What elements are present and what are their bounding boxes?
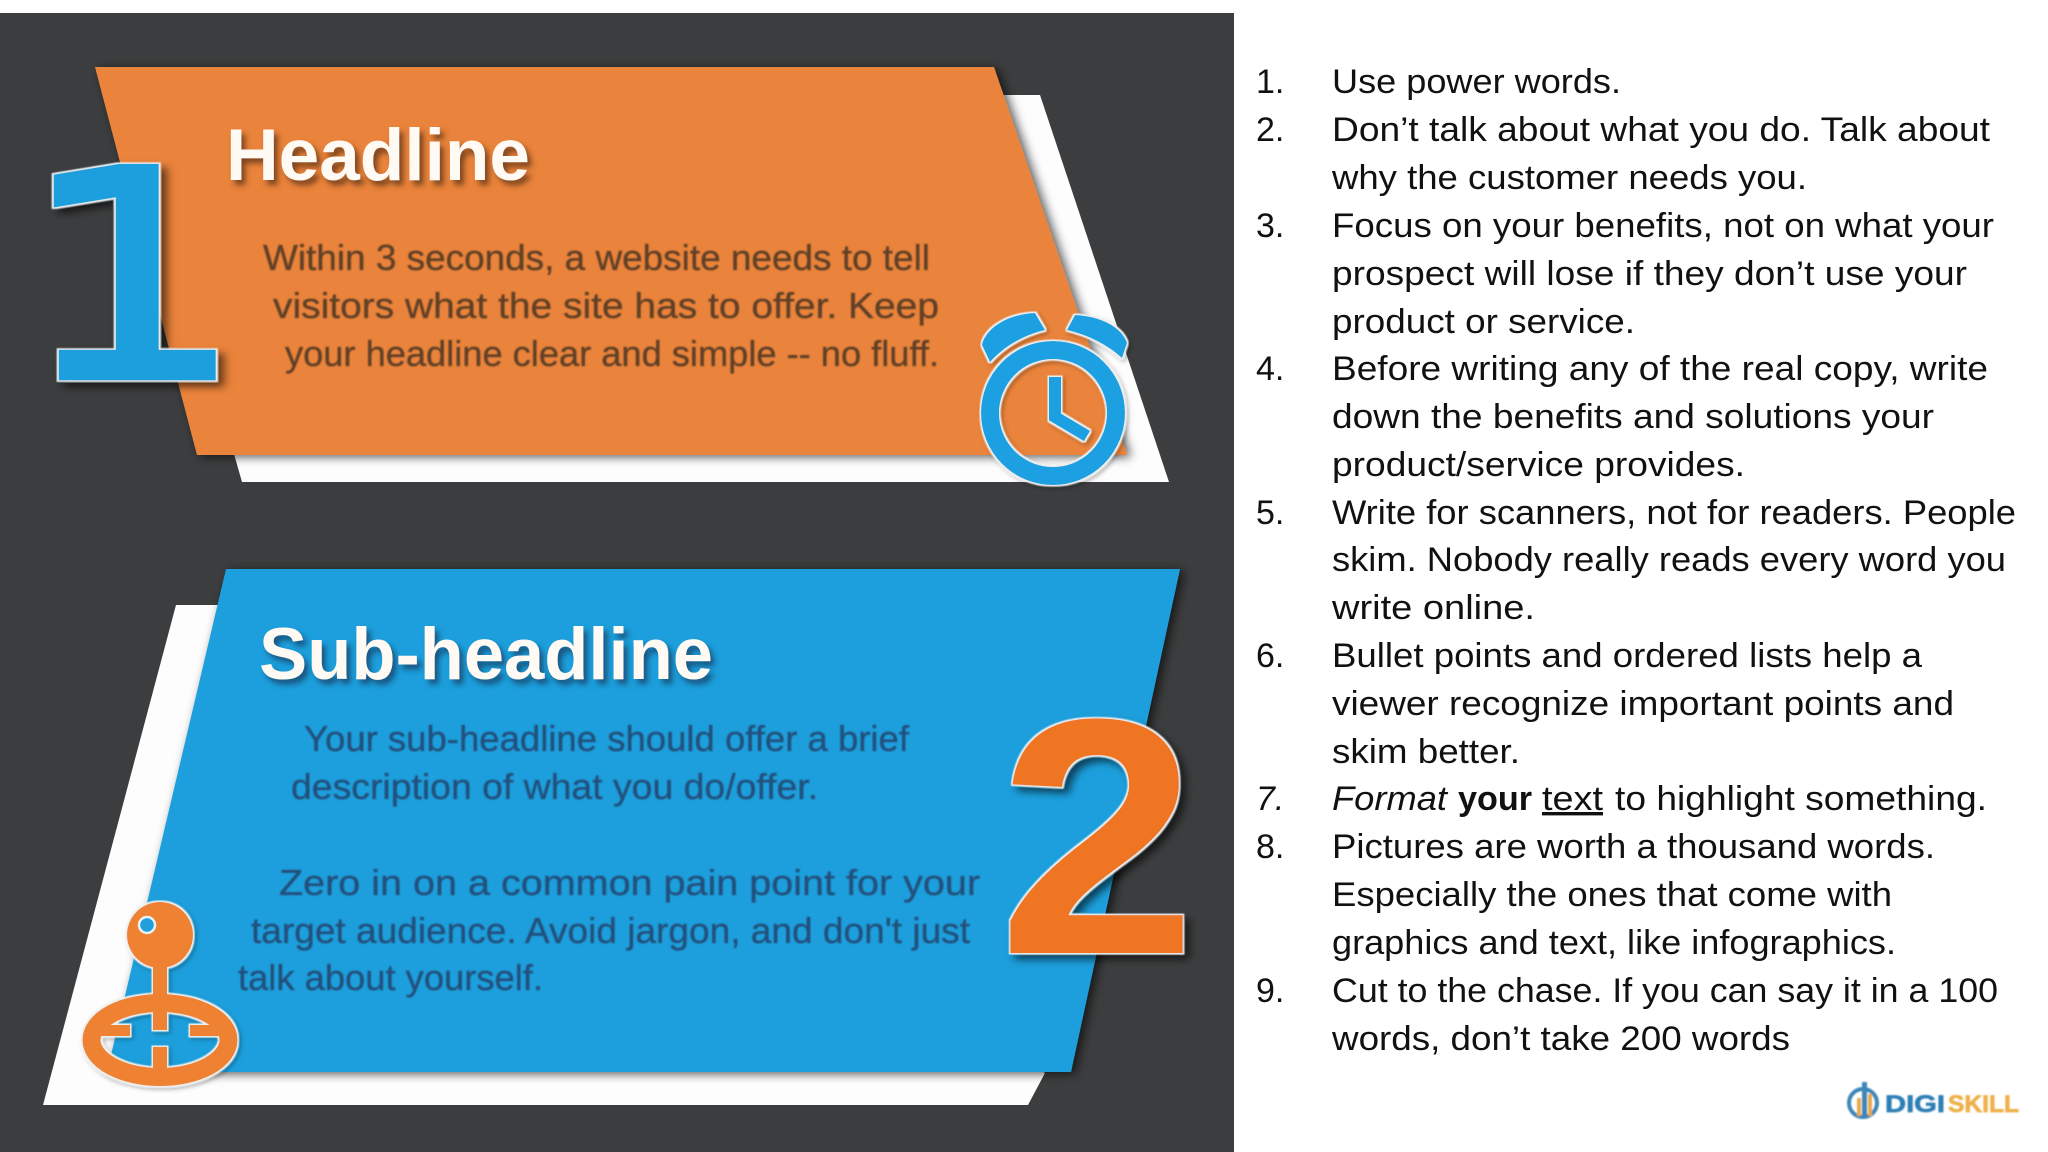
icon: joystick <box>92 902 228 1077</box>
numbered tips list <box>1256 63 2016 1058</box>
tip 7: to highlight something. <box>1615 780 1987 818</box>
tip 5: 5. <box>1256 494 1284 532</box>
white backing shape <box>230 95 1169 482</box>
heading: Headline: Headline <box>226 115 530 196</box>
logo wordmark: DIGI: DIGI <box>1885 1091 1945 1118</box>
headline body text: your headline clear and simple -- no fluff. <box>285 333 939 374</box>
tip 2 <box>1256 111 1991 197</box>
blue card <box>107 569 1180 1072</box>
headline body text: Within 3 seconds, a website needs to tell <box>263 237 930 278</box>
tip 9 <box>1256 972 1998 1058</box>
tip 3 <box>1256 207 1994 341</box>
sub-headline body text: target audience. Avoid jargon, and don't just <box>251 910 970 951</box>
tip 3: product or service. <box>1332 303 1635 341</box>
tip 4 <box>1256 350 1988 484</box>
tip 9: words, don’t take 200 words <box>1331 1020 1790 1058</box>
tip 4: down the benefits and solutions your <box>1332 398 1934 436</box>
headline body text <box>263 237 939 374</box>
tip 4: Before writing any of the real copy, write <box>1332 350 1988 388</box>
tip 3: Focus on your benefits, not on what your <box>1332 207 1994 245</box>
tip 1: Use power words. <box>1332 63 1621 101</box>
tip 5: skim. Nobody really reads every word you <box>1332 541 2006 579</box>
logo wordmark: SKILL: SKILL <box>1948 1091 2019 1118</box>
tip 5: Write for scanners, not for readers. People <box>1332 494 2016 532</box>
sub-headline body text: Your sub-headline should offer a brief <box>304 718 910 759</box>
number 2: 2 <box>998 649 1197 1025</box>
tip 2: 2. <box>1256 111 1284 149</box>
logo: DigiSkill <box>1849 1082 2019 1118</box>
tip 8 <box>1256 828 1935 962</box>
sub-headline body text <box>238 718 980 998</box>
tip 2: why the customer needs you. <box>1331 159 1807 197</box>
tip 6: 6. <box>1256 637 1284 675</box>
tip 6: skim better. <box>1332 733 1520 771</box>
tip 7: Format <box>1332 780 1449 818</box>
number 1: 1 <box>19 111 244 446</box>
tip 8: Especially the ones that come with <box>1332 876 1892 914</box>
tip 1: 1. <box>1256 63 1284 101</box>
tip 6: Bullet points and ordered lists help a <box>1332 637 1922 675</box>
tip 8: graphics and text, like infographics. <box>1332 924 1896 962</box>
orange card <box>95 67 1127 455</box>
tip 7: your <box>1458 780 1532 818</box>
dark background panel <box>0 13 1234 1152</box>
tip 7: text <box>1542 780 1604 818</box>
panel: headline card <box>19 67 1169 482</box>
tip 3: prospect will lose if they don’t use your <box>1332 255 1967 293</box>
tip 8: Pictures are worth a thousand words. <box>1332 828 1935 866</box>
tip 5: write online. <box>1331 589 1535 627</box>
icon: alarm clock <box>982 313 1127 476</box>
tip 7 <box>1256 780 1987 818</box>
white backing shape <box>43 605 1045 1105</box>
panel: sub-headline card <box>43 569 1197 1105</box>
tip 4: 4. <box>1256 350 1284 388</box>
tip 3: 3. <box>1256 207 1284 245</box>
tip 5 <box>1256 494 2016 627</box>
tip 6: viewer recognize important points and <box>1332 685 1954 723</box>
tip 4: product/service provides. <box>1332 446 1745 484</box>
logo mark <box>1849 1082 1877 1118</box>
sub-headline body text: talk about yourself. <box>238 957 543 998</box>
tip 9: 9. <box>1256 972 1284 1010</box>
tip 6 <box>1256 637 1954 771</box>
tip 2: Don’t talk about what you do. Talk about <box>1332 111 1991 149</box>
headline body text: visitors what the site has to offer. Keep <box>273 285 939 326</box>
joystick ball highlight <box>139 917 155 933</box>
tip 9: Cut to the chase. If you can say it in a 100 <box>1332 972 1998 1010</box>
sub-headline body text: description of what you do/offer. <box>291 766 818 807</box>
tip 7: 7. <box>1256 780 1284 818</box>
tip 8: 8. <box>1256 828 1284 866</box>
heading: Sub-headline: Sub-headline <box>259 614 713 695</box>
sub-headline body text: Zero in on a common pain point for your <box>279 862 980 903</box>
